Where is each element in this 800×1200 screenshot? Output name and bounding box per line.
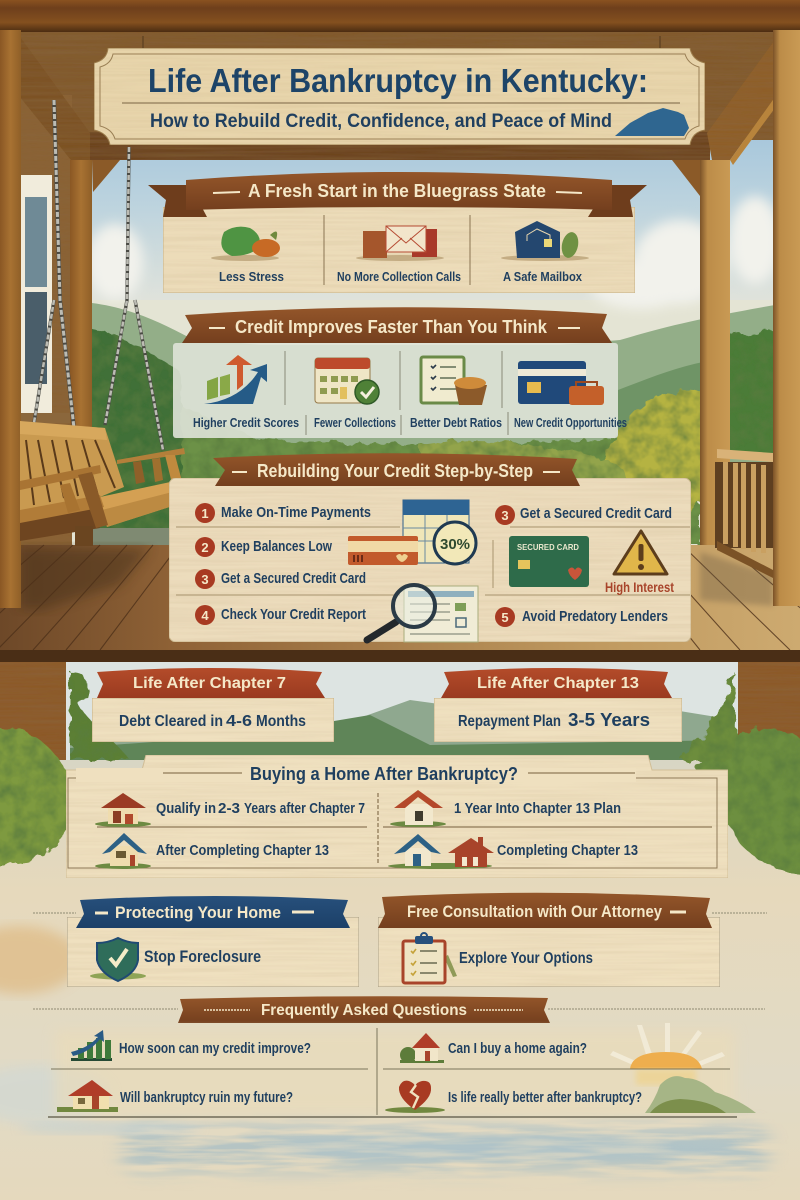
ribbon heading — [148, 172, 647, 217]
icon: house blue — [95, 833, 151, 869]
ribbon heading: A Fresh Start in the Bluegrass State — [248, 181, 546, 201]
panel: life after chapter 7 — [92, 668, 334, 742]
icon: growth chart — [71, 1030, 112, 1061]
icon: secured card — [509, 536, 589, 587]
forest and trees — [86, 328, 780, 545]
ribbon: Life After Chapter 7 — [133, 675, 286, 692]
icon: calendar — [315, 358, 379, 404]
icon: house red — [95, 793, 151, 827]
row text: After Completing Chapter 13 — [156, 843, 329, 859]
step 3: Get a Secured Credit Card — [221, 570, 366, 587]
panel: protecting your home — [67, 896, 359, 987]
icon: clipboard — [403, 933, 457, 983]
text: repayment plan: 3-5 Years — [568, 710, 650, 730]
step 3 right: 3 — [501, 508, 509, 523]
icon: warning triangle — [614, 531, 667, 574]
question: Can I buy a home again? — [448, 1041, 587, 1057]
left rafter — [20, 37, 90, 160]
panel: credit improves — [173, 307, 627, 438]
deck fascia — [0, 650, 800, 662]
icon: house white — [390, 790, 446, 827]
left wall — [20, 95, 72, 545]
step 4: 4 — [201, 608, 209, 623]
main title: Life After Bankruptcy in Kentucky: — [148, 62, 648, 99]
ribbon — [76, 896, 350, 928]
front posts — [0, 30, 21, 608]
row text: Years after Chapter 7 — [244, 801, 365, 817]
ribbon: Free Consultation with Our Attorney — [407, 902, 662, 921]
step 3 — [195, 569, 366, 589]
question: Is life really better after bankruptcy? — [448, 1090, 642, 1106]
text: debt cleared: Debt Cleared in — [119, 713, 223, 730]
icon: red card — [348, 536, 418, 565]
title sign — [94, 36, 705, 145]
step 1 — [195, 503, 371, 523]
step 4 — [195, 605, 366, 625]
ribbon: Life After Chapter 13 — [477, 675, 639, 692]
parchment lower field — [0, 760, 800, 1200]
label: Less Stress — [219, 269, 284, 284]
icon: house — [57, 1080, 118, 1112]
panel: buying a home — [66, 755, 728, 878]
high interest label: High Interest — [605, 580, 674, 595]
ribbon heading: Credit Improves Faster Than You Think — [235, 317, 548, 337]
icon: envelope — [356, 226, 444, 261]
question: How soon can my credit improve? — [119, 1041, 311, 1057]
ribbon — [178, 996, 550, 1023]
panel: a fresh start — [148, 172, 647, 293]
panel: life after chapter 13 — [434, 668, 682, 742]
text: Stop Foreclosure — [144, 947, 261, 966]
ribbon — [97, 668, 325, 698]
lintel beam — [88, 132, 710, 160]
right rafter highlight — [730, 97, 775, 165]
text: repayment plan: Repayment Plan — [458, 713, 561, 730]
step 2 — [195, 537, 332, 557]
step 1: 1 — [201, 506, 209, 521]
swing chains — [25, 100, 163, 478]
deck — [0, 545, 800, 652]
right rafter — [707, 33, 780, 160]
text: debt cleared: 4-6 — [226, 713, 252, 730]
section: frequently asked questions — [48, 996, 756, 1117]
text: repayment plan — [458, 710, 650, 730]
step 5 — [495, 607, 668, 627]
ribbon: Frequently Asked Questions — [261, 1002, 467, 1019]
icon: shield — [90, 938, 146, 981]
step 5: 5 — [501, 610, 509, 625]
icon: credit card and case — [518, 361, 604, 405]
ribbon — [378, 893, 712, 928]
porch swing — [20, 100, 187, 546]
label: No More Collection Calls — [337, 269, 461, 284]
ribbon heading — [213, 453, 580, 486]
icon: calendar with 30 percent — [348, 500, 476, 565]
subtitle: How to Rebuild Credit, Confidence, and Peace of Mind — [150, 111, 612, 132]
icon: report and magnifier — [367, 585, 478, 642]
step 2: Keep Balances Low — [221, 538, 332, 555]
posts — [70, 160, 92, 430]
row text: 2-3 — [218, 801, 240, 817]
question: Will bankruptcy ruin my future? — [120, 1090, 293, 1106]
row text: Qualify in — [156, 801, 216, 817]
lower wood wall — [0, 662, 800, 772]
step 4: Check Your Credit Report — [221, 606, 366, 623]
window — [21, 175, 71, 423]
icon: houses blue and red — [388, 834, 494, 869]
ribbon — [441, 668, 672, 698]
step 1: Make On-Time Payments — [221, 504, 371, 521]
label: Higher Credit Scores — [193, 415, 299, 430]
illustration: sunrise over hill — [610, 1023, 756, 1113]
label: Better Debt Ratios — [410, 415, 502, 430]
ribbon heading: Rebuilding Your Credit Step-by-Step — [257, 461, 533, 481]
icon: secured card: SECURED CARD — [517, 542, 579, 552]
step 5: Avoid Predatory Lenders — [522, 608, 668, 625]
ribbon: Protecting Your Home — [115, 903, 281, 922]
row text — [156, 801, 365, 817]
text: debt cleared — [119, 713, 306, 730]
row text: 1 Year Into Chapter 13 Plan — [454, 801, 621, 817]
icon: Kentucky state — [615, 108, 689, 136]
panel: free consultation — [378, 893, 720, 987]
icon: broken heart — [385, 1081, 445, 1113]
side trees — [0, 672, 800, 880]
text: debt cleared: Months — [256, 713, 306, 730]
panel: rebuilding your credit — [169, 453, 691, 642]
row text: Completing Chapter 13 — [497, 843, 638, 859]
hills — [92, 303, 775, 480]
icon: rising chart — [204, 355, 267, 404]
heading: Buying a Home After Bankruptcy? — [250, 764, 518, 784]
step 3 right — [495, 505, 672, 525]
icon: mailbox — [501, 221, 589, 261]
brackets — [92, 160, 700, 196]
text: Explore Your Options — [459, 950, 593, 967]
step 3: 3 — [201, 572, 209, 587]
icon: home — [400, 1033, 444, 1063]
railing — [715, 449, 773, 578]
grey wall under swing — [85, 528, 175, 548]
icon: fruit — [211, 227, 280, 261]
label: Fewer Collections — [314, 415, 396, 430]
step 3 right: Get a Secured Credit Card — [520, 505, 672, 522]
label: New Credit Opportunities — [514, 415, 627, 430]
clouds — [87, 196, 781, 309]
icon: calendar with 30 percent: 30% — [440, 536, 470, 553]
step 2: 2 — [201, 540, 209, 555]
icon: checklist and basket — [421, 357, 487, 405]
ribbon heading — [182, 307, 612, 343]
label: A Safe Mailbox — [503, 269, 583, 284]
ceiling — [0, 30, 800, 140]
